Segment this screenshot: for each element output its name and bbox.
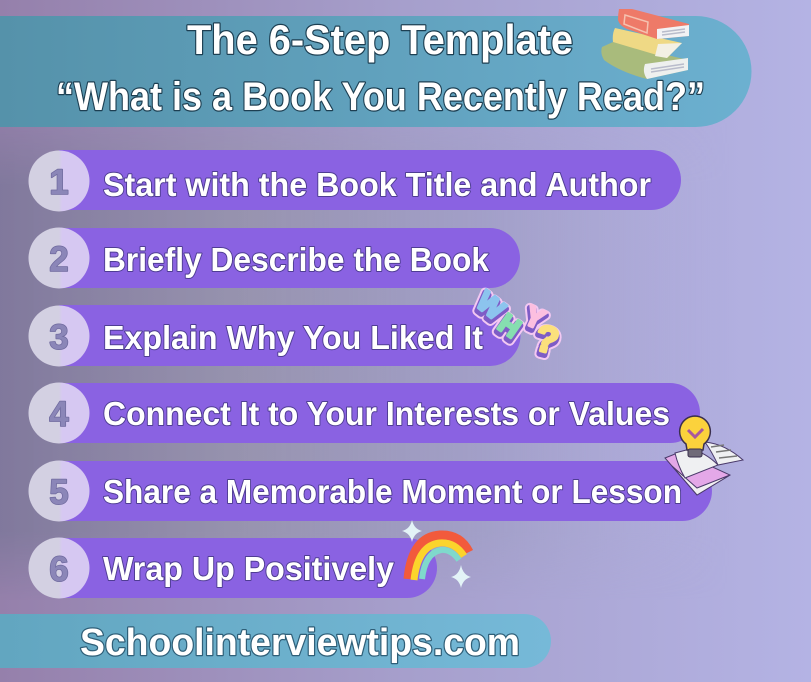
icon: WHY? sticker: Y [519,302,549,339]
icon: WHY? sticker: H [492,311,525,347]
pill [59,538,437,598]
number: 2 [49,240,69,279]
icon: WHY? sticker: H [492,311,525,347]
number badge [28,228,90,288]
number badge [28,538,90,598]
step text: Wrap Up Positively [103,550,395,587]
icon: WHY? sticker: Y [520,299,550,336]
number badge [28,306,90,366]
number badge [28,460,90,522]
pill [59,461,712,521]
step 5 [28,460,712,522]
title: The 6-Step Template [187,16,573,63]
icon: WHY? sticker: Y [519,302,549,339]
subtitle: “What is a Book You Recently Read?” [56,75,705,119]
pill [59,383,700,443]
number badge [28,150,90,212]
sparkle top [402,520,422,542]
number: 5 [49,473,69,512]
step text: Connect It to Your Interests or Values [103,395,670,432]
header banner [0,16,752,127]
step text: Share a Memorable Moment or Lesson [103,473,682,510]
icon: WHY? sticker: W [470,288,510,329]
step text: Briefly Describe the Book [103,241,490,278]
number: 3 [49,318,69,357]
pill [59,305,520,366]
icon: WHY? sticker: ? [531,317,563,362]
footer banner [0,614,551,668]
icon: WHY? sticker: ? [530,320,562,365]
number badge [28,382,90,444]
icon: WHY? sticker: W [470,288,510,329]
number: 6 [49,550,69,589]
icon: stack of books [601,9,689,79]
step 6 [28,538,437,598]
icon: WHY? sticker [470,285,563,365]
icon: WHY? sticker: H [493,308,526,344]
number: 4 [49,395,69,434]
icon: WHY? sticker: W [471,285,511,326]
step 1 [28,150,681,212]
step text: Start with the Book Title and Author [103,166,651,203]
step 3 [28,305,520,366]
sparkle bottom [451,565,471,588]
number: 1 [49,163,69,202]
step 2 [28,228,520,288]
icon: open book with lightbulb [665,416,743,495]
website: Schoolinterviewtips.com [80,622,520,664]
pill [59,150,681,210]
icon: rainbow with sparkles [402,520,471,588]
step text: Explain Why You Liked It [103,319,483,356]
step 4 [28,382,700,444]
pill [59,228,520,288]
icon: WHY? sticker: ? [530,320,562,365]
